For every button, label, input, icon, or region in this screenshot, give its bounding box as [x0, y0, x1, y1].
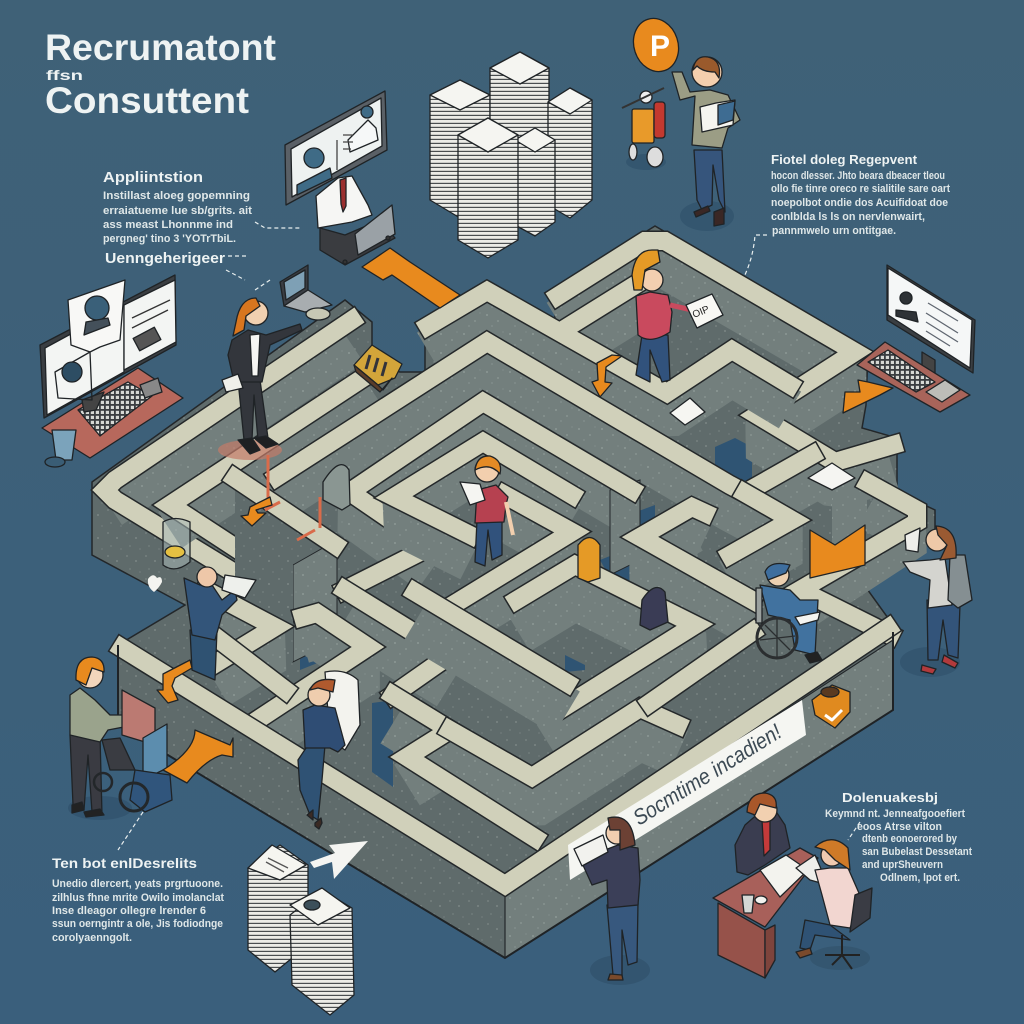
band: right tower and hook — [800, 483, 917, 635]
boy in red with paper — [460, 456, 513, 566]
band: left central diagonal — [345, 590, 450, 685]
laptop on ledge — [280, 265, 332, 320]
paper stacks: bottom left — [248, 845, 354, 1015]
band: fourth chevron — [345, 402, 640, 590]
front left wall face — [118, 660, 505, 958]
text block: bottom left results: zilhlus fhne mrite Owilo imolanclat — [52, 892, 224, 904]
sitting person with paper — [298, 671, 360, 829]
orange arrow under keyboard — [843, 380, 893, 413]
tower wall — [832, 475, 867, 548]
text block: application: ass meast Lhonnme ind — [103, 219, 233, 231]
text block: bottom left results: Inse dleagor ollegre lrender 6 — [52, 905, 206, 917]
band: third chevron — [277, 342, 812, 580]
maze outline shadow lines — [118, 632, 893, 958]
text block: field delay requirement: hocon dlesser. Jhto beara dbeacer tleou — [771, 170, 945, 182]
text block: field delay requirement: pannmwelo urn ontitgae. — [772, 225, 896, 237]
right computer desk — [857, 265, 975, 412]
woman in black suit — [218, 298, 302, 460]
text block: bottom right decision: eoos Atrse vilton — [857, 821, 942, 833]
title — [45, 27, 276, 121]
text block: bottom right decision: Odlnem, lpot ert. — [880, 872, 960, 884]
band: small right return — [640, 507, 752, 625]
orange arrow: top connector — [362, 248, 460, 308]
text block: field delay requirement: noepolbot ondie dos Acuifidoat doe — [771, 197, 948, 209]
text block: field delay requirement — [771, 152, 950, 237]
text block: field delay requirement: conlblda ls ls on nervlenwairt, — [771, 211, 925, 223]
text block: bottom left results: corolyaenngolt. — [52, 932, 132, 944]
text block: bottom left results: Ten bot enlDesrelits — [52, 855, 197, 871]
wheelchair and screen — [94, 690, 172, 812]
person with orange hair at computer — [68, 657, 134, 820]
dark object — [640, 588, 668, 630]
text block: application — [103, 169, 252, 267]
orange arrow: small down — [157, 660, 192, 703]
orange arrow near pink woman — [592, 355, 622, 397]
band: inner ring — [394, 442, 572, 560]
text block: bottom right decision: Dolenuakesbj — [842, 790, 938, 805]
band: left diagonal to tall wall — [235, 478, 337, 662]
person in blue from back — [184, 567, 256, 680]
heart icon — [148, 575, 162, 592]
paper on wall — [670, 398, 705, 425]
band: top right loop — [558, 241, 893, 487]
monitor with recruiter on top — [285, 91, 395, 265]
banner — [568, 700, 806, 880]
text block: bottom right decision: dtenb eonoerored by — [862, 833, 958, 845]
text block: bottom left results: ssun oerngintr a ole, Jis fodiodnge — [52, 918, 223, 930]
text block: bottom right decision — [825, 790, 972, 884]
text block: application: erraiatueme lue sb/grits. ait — [103, 205, 252, 217]
person with orange sign: P — [650, 30, 670, 63]
interview desk — [713, 793, 872, 978]
title: ffsn — [46, 67, 83, 83]
woman in pink with paper: OIP — [691, 304, 711, 321]
paper stacks: top center — [430, 52, 592, 258]
text block: bottom right decision: Keymnd nt. Jenneafgooefiert — [825, 808, 965, 820]
front right wall face — [505, 640, 893, 958]
salmon markers and small arrow — [241, 455, 320, 540]
left computer desk — [40, 275, 183, 467]
band: lower middle — [393, 632, 752, 838]
dashed connectors — [118, 222, 860, 850]
text block: bottom left results — [52, 855, 224, 944]
band: front edges — [122, 628, 888, 885]
banner: Socmtime incadien! — [628, 719, 786, 830]
orange notch block — [810, 525, 865, 578]
person with orange sign — [627, 13, 740, 231]
grey arch — [323, 465, 350, 510]
bottom woman reading — [574, 817, 650, 985]
scooter with bag — [622, 88, 666, 170]
title: Recrumatont — [45, 27, 276, 68]
person with backpack — [900, 526, 972, 677]
gold device — [354, 345, 402, 392]
band: second ledge — [170, 370, 375, 590]
text block: application: Appliintstion — [103, 169, 203, 186]
text block: field delay requirement: Fiotel doleg Regepvent — [771, 152, 918, 167]
orange bag — [578, 538, 600, 582]
text block: bottom right decision: and uprSheuvern — [862, 859, 943, 871]
band: top chevron — [428, 282, 790, 418]
text block: bottom left results: Unedio dlercert, yeats prgrtuoone. — [52, 878, 223, 890]
person in wheelchair — [756, 564, 822, 663]
woman in pink with paper — [632, 250, 723, 382]
maze base silhouette — [92, 226, 935, 958]
maze — [92, 226, 935, 958]
paper on tower — [808, 463, 855, 490]
white arrow — [310, 841, 368, 879]
title: Consuttent — [45, 80, 249, 121]
band: outer left ledge — [105, 320, 352, 607]
text block: bottom right decision: san Bubelast Dessetant — [862, 846, 972, 858]
orange badge — [812, 685, 850, 728]
text block: application: pergneg' tino 3 'YOTrTbiL. — [103, 233, 236, 245]
glass jar — [163, 518, 190, 569]
band: central box — [393, 565, 695, 746]
text block: application: Instillast aloeg gopemning — [103, 190, 250, 202]
text block: application: Uenngeherigeer — [105, 250, 225, 267]
band: lower left block — [205, 590, 368, 742]
orange arrow: big curved — [163, 730, 233, 783]
text block: field delay requirement: ollo fie tinre oreco re sialitile sare oart — [771, 183, 950, 195]
dark floor gaps — [300, 438, 752, 787]
band: middle ring lower — [448, 495, 572, 633]
